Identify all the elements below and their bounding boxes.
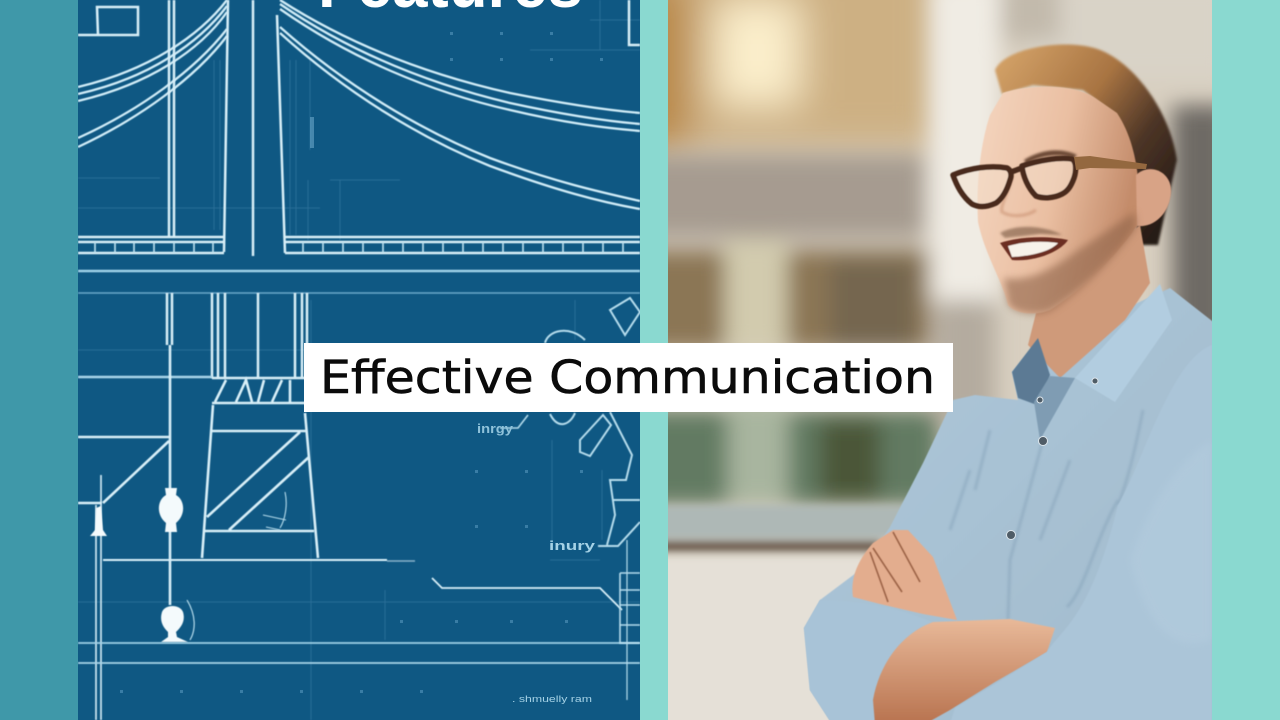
man: glasses temple arm <box>1074 156 1147 170</box>
caption box <box>304 343 953 412</box>
ornaments: lamp fixtures <box>90 488 188 642</box>
man: shirt buttons <box>1006 378 1098 540</box>
man: finger lines <box>870 532 920 602</box>
panel: right mint strip <box>1212 0 1280 720</box>
man: ear <box>1136 169 1171 226</box>
man: front sleeve <box>1026 492 1212 720</box>
man: shirt collar <box>1012 284 1172 440</box>
panel: blueprint <box>78 0 640 720</box>
blurred street background <box>668 0 1212 720</box>
faint blueprint grid <box>78 0 640 720</box>
blueprint annotation: upper: inrgy <box>477 421 514 436</box>
man: shirt torso <box>804 288 1230 720</box>
man: rolled sleeve cuff <box>804 600 830 720</box>
panel: photo of smiling man <box>668 0 1212 720</box>
panel: mint divider <box>640 0 668 720</box>
man: eyebrow and moustache shadow <box>1000 150 1077 238</box>
vertical dimension mark <box>310 117 314 148</box>
caption background <box>304 343 953 412</box>
man: hair back <box>995 45 1177 245</box>
gear outline and right-side details <box>187 298 640 700</box>
man: folded hand <box>852 530 957 620</box>
panel: left teal strip <box>0 0 78 720</box>
man: shirt folds and placket <box>950 410 1143 620</box>
man: face <box>978 87 1139 313</box>
man: neck <box>1028 225 1150 378</box>
man: stubble beard <box>1004 212 1136 314</box>
lower tower structure <box>78 345 640 720</box>
blueprint annotation: lower: inury <box>549 538 596 553</box>
blueprint annotation: bottom note: . shmuelly ram <box>512 694 592 704</box>
man: forearm <box>873 619 1055 720</box>
caption text: Effective Communication <box>320 351 935 404</box>
bridge cables <box>78 0 640 209</box>
man: nose and cheek shadow <box>1002 175 1036 216</box>
bridge towers and deck rails <box>78 0 640 378</box>
man: glasses <box>953 158 1076 206</box>
deck rail ticks <box>95 242 623 253</box>
faint grid dots <box>120 32 603 693</box>
man: sleeve highlight <box>1130 440 1212 643</box>
man: smile with teeth <box>1000 237 1068 260</box>
